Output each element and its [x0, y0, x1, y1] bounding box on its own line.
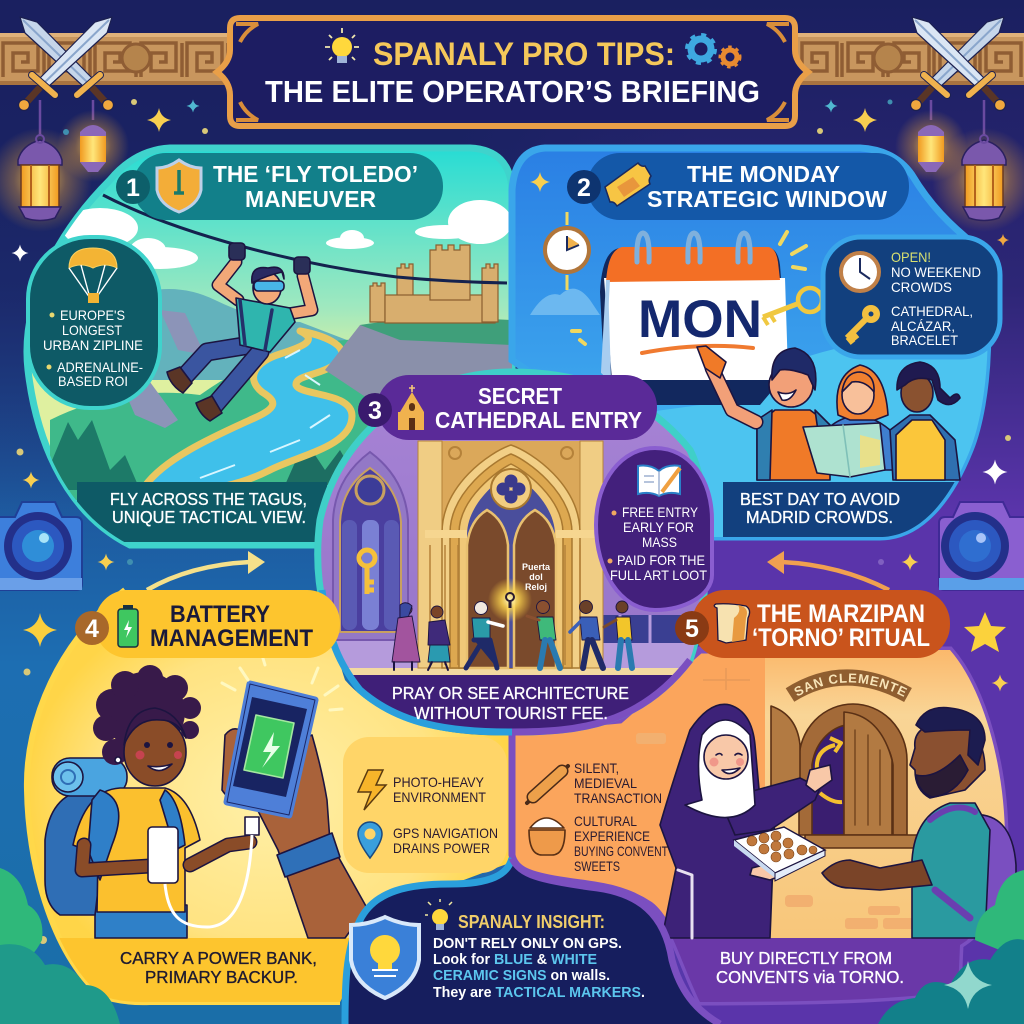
- panel 4: battery: [20, 590, 512, 1004]
- header 1 pill: [116, 153, 443, 220]
- caption 5: [716, 948, 904, 987]
- header 5 pill: [675, 590, 950, 658]
- decorative border, swords and lanterns: left: [0, 17, 228, 232]
- pod 5 text: SWEETS: [574, 858, 620, 874]
- panel: spanaly insight: DON'T RELY ONLY ON GPS.: [433, 935, 622, 952]
- caption 2: MADRID CROWDS.: [746, 507, 893, 527]
- info pod 3: FULL ART LOOT: [610, 567, 707, 583]
- lower wall and floor: [336, 640, 694, 668]
- icon: lightbulb: [425, 899, 452, 930]
- caption 3: [392, 683, 629, 723]
- caption 4: CARRY A POWER BANK,: [120, 948, 317, 968]
- icon: pod clock: [841, 253, 879, 291]
- pod 5 text: CULTURAL: [574, 813, 637, 829]
- pod 5 text: SILENT,: [574, 760, 619, 776]
- glowing keyhole: [488, 578, 532, 622]
- title plaque: [217, 18, 808, 126]
- info pod 4: ENVIRONMENT: [393, 789, 486, 805]
- icon: title lightbulb: [325, 28, 359, 63]
- zipline: [103, 195, 507, 283]
- icon: smartphone charging: [222, 655, 367, 938]
- label puerta del reloj: Puerta: [522, 562, 551, 572]
- icon: gears: [687, 35, 740, 67]
- caption 1: [110, 489, 307, 527]
- info pod 1: [28, 237, 160, 408]
- foliage: bottom right: [878, 870, 1024, 1024]
- pod 5 text: TRANSACTION: [574, 790, 662, 806]
- header 5 pill: 5: [685, 615, 699, 643]
- portal: [418, 441, 603, 668]
- caption 1: FLY ACROSS THE TAGUS,: [110, 489, 307, 509]
- icon: bread: [714, 604, 750, 643]
- caption 2: [740, 489, 900, 527]
- icon: clock: [545, 212, 589, 290]
- info pod 2: CROWDS: [891, 279, 952, 295]
- icon: gold key: [847, 305, 880, 343]
- side window: [333, 452, 408, 640]
- title plaque: SPANALY PRO TIPS:: [373, 36, 675, 72]
- caption 3: WITHOUT TOURIST FEE.: [414, 703, 608, 723]
- info pod 2: NO WEEKEND: [891, 264, 981, 280]
- icon: church: [398, 385, 424, 430]
- caption 5: CONVENTS via TORNO.: [716, 967, 904, 987]
- info pod 3: MASS: [642, 534, 677, 550]
- info pod 4: DRAINS POWER: [393, 840, 490, 856]
- info pod 3: EARLY FOR: [623, 519, 694, 535]
- caption 4: PRIMARY BACKUP.: [145, 967, 298, 987]
- header 2 pill: [567, 153, 909, 220]
- icon: shield with bulb: [351, 917, 419, 998]
- traveller with power bank: [45, 665, 250, 938]
- man receiving sweets: [822, 708, 1016, 938]
- pod 5 text: MEDIEVAL: [574, 775, 637, 791]
- panel: spanaly insight: Look for BLUE & WHITE: [433, 951, 597, 968]
- header 1 pill: THE ‘FLY TOLEDO’: [213, 161, 418, 187]
- icon: parachute: [69, 248, 117, 303]
- box of marzipan: [734, 827, 825, 881]
- pod 5 text: [574, 760, 668, 874]
- header 3 pill: SECRET: [478, 383, 562, 409]
- icon: battery: [118, 605, 138, 647]
- label puerta del reloj: Reloj: [525, 582, 547, 592]
- nun with sweets: [660, 704, 832, 938]
- header 1 pill: 1: [126, 174, 140, 202]
- header 5 pill: ‘TORNO’ RITUAL: [752, 624, 930, 652]
- info pod 3: FREE ENTRY: [622, 504, 699, 520]
- label puerta del reloj: dol: [529, 572, 543, 582]
- wall bricks: [636, 733, 915, 929]
- convent door with san clemente sign: [771, 704, 917, 848]
- panel 3: cathedral: [310, 372, 710, 735]
- sign: san clemente: SAN CLEMENTE: [794, 674, 908, 697]
- info pod 1: EUROPE'S: [60, 307, 125, 323]
- camera: right: [939, 502, 1024, 590]
- caption 2: BEST DAY TO AVOID: [740, 489, 900, 509]
- pod 5 text: EXPERIENCE: [574, 828, 650, 844]
- info pod 4: [343, 737, 507, 873]
- info pod 2: OPEN!: [891, 249, 931, 265]
- zipline person: [167, 243, 312, 421]
- clouds: [62, 200, 512, 269]
- icon: ticket: [605, 163, 651, 206]
- info pod 1: ADRENALINE-: [57, 359, 143, 375]
- header 2 pill: STRATEGIC WINDOW: [647, 186, 887, 212]
- header 2 pill: THE MONDAY: [687, 161, 840, 187]
- icon: calendar: MON: [638, 290, 762, 349]
- three travellers: [697, 346, 960, 480]
- caption 5: BUY DIRECTLY FROM: [720, 948, 892, 968]
- info pod 2: [823, 237, 1000, 357]
- info pod 1: LONGEST: [62, 322, 122, 338]
- caption 1: UNIQUE TACTICAL VIEW.: [112, 507, 306, 527]
- info pod 1: BASED ROI: [58, 373, 128, 389]
- panel: spanaly insight: They are TACTICAL MARKERS.: [433, 984, 645, 1001]
- foliage: bottom left: [0, 868, 120, 1024]
- charging cable: [165, 835, 252, 927]
- rotation arrow: [817, 738, 842, 802]
- decorative border, swords and lanterns: right: [796, 17, 1024, 232]
- panel: spanaly insight: CERAMIC SIGNS on walls.: [433, 967, 610, 984]
- label puerta del reloj: [522, 562, 551, 592]
- icon: map pin: [358, 822, 382, 858]
- caption 3: PRAY OR SEE ARCHITECTURE: [392, 683, 629, 703]
- header 4 pill: [75, 590, 340, 658]
- panel: spanaly insight: [345, 858, 720, 1024]
- arrow: left curved: [147, 551, 265, 590]
- header 4 pill: BATTERY: [170, 601, 270, 628]
- header 2 pill: 2: [577, 174, 591, 202]
- info pod 2: CATHEDRAL,: [891, 303, 973, 319]
- header 4 pill: MANAGEMENT: [150, 625, 313, 652]
- icon: shield with sword: [157, 160, 201, 212]
- arrow: right curved: [767, 551, 889, 590]
- cliff and castle: [325, 324, 512, 396]
- header 3 pill: 3: [368, 397, 382, 425]
- icon: open book and pencil: [638, 466, 680, 496]
- header 1 pill: MANEUVER: [245, 186, 376, 212]
- info pod 2: ALCÁZAR,: [891, 318, 955, 334]
- bowl of sugar icon: [529, 818, 565, 855]
- info pod 3: [596, 448, 712, 610]
- icon: gold key: [359, 550, 375, 594]
- caption 4: [120, 948, 317, 987]
- header 4 pill: 4: [85, 615, 99, 643]
- info pod 4: PHOTO-HEAVY: [393, 774, 485, 790]
- info pod 3: PAID FOR THE: [617, 552, 705, 568]
- camera: left: [0, 502, 82, 590]
- info pod 2: BRACELET: [891, 332, 958, 348]
- panel: spanaly insight: SPANALY INSIGHT:: [458, 912, 605, 932]
- visitors: [392, 600, 632, 670]
- info pod 4: GPS NAVIGATION: [393, 825, 498, 841]
- title plaque: THE ELITE OPERATOR’S BRIEFING: [265, 74, 760, 109]
- icon: calendar: [572, 232, 806, 405]
- header 5 pill: THE MARZIPAN: [757, 600, 925, 628]
- pod 5 text: BUYING CONVENT: [574, 843, 668, 859]
- info pod 1: URBAN ZIPLINE: [43, 337, 143, 353]
- rolling pin icon: [527, 766, 568, 803]
- icon: lightning: [358, 770, 386, 810]
- icon: key to pod: [763, 288, 822, 325]
- header 3 pill: CATHEDRAL ENTRY: [435, 407, 642, 433]
- header 3 pill: [358, 375, 657, 440]
